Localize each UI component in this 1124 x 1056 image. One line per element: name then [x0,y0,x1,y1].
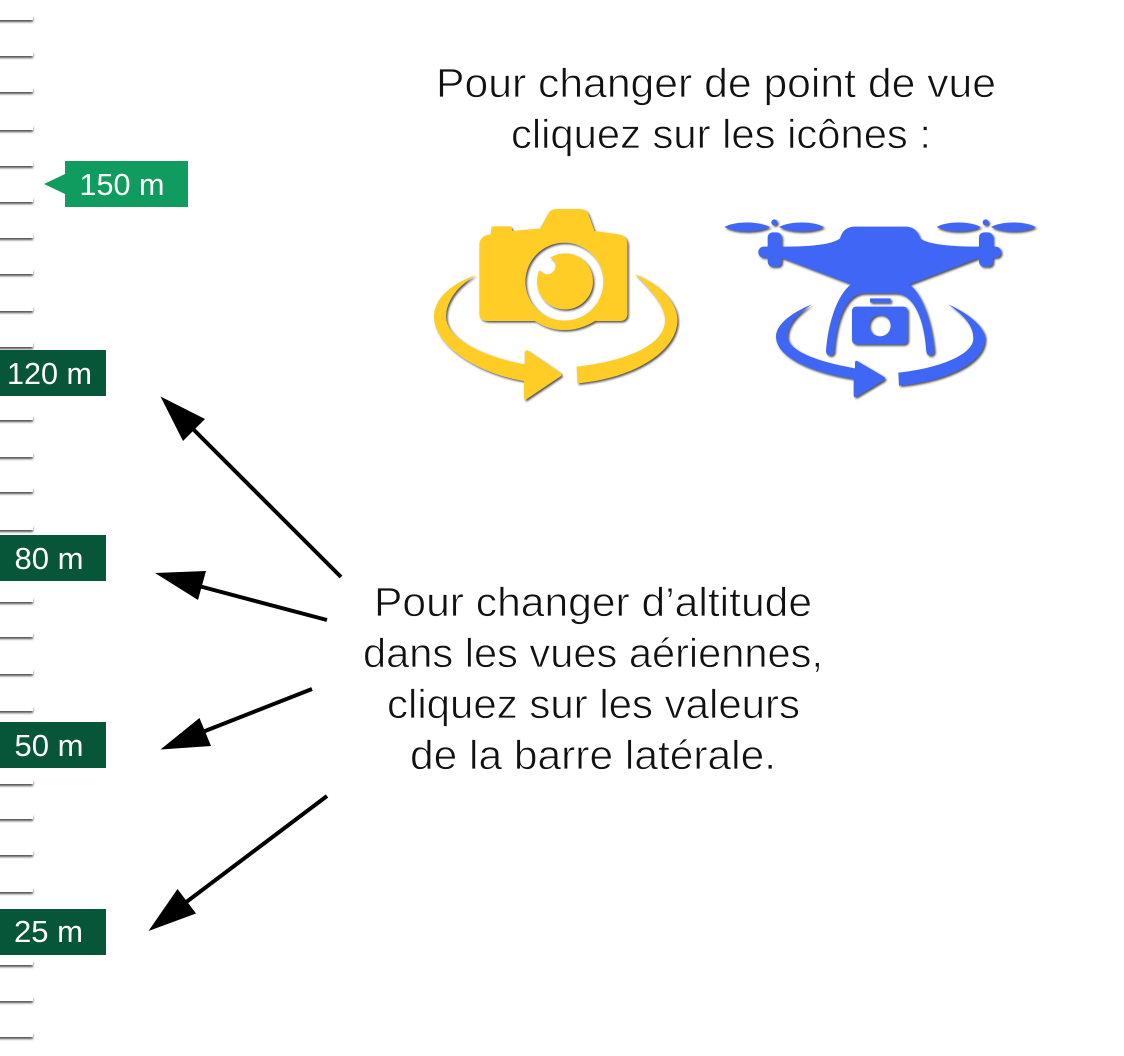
heading: point de vue instruction [436,60,996,157]
arrow: to 80 m [155,571,327,620]
arrow: to 25 m [148,796,327,931]
label: 150 m selected [44,161,188,207]
text: altitude instruction: cliquez sur les valeurs [387,681,800,727]
text: altitude instruction: dans les vues aériennes, [363,630,823,676]
label: 50 m [0,722,106,768]
icon: rotating camera [434,209,677,400]
altitude scale ticks [0,15,33,1037]
icon: rotating drone [724,219,1036,397]
arrow: to 120 m [160,396,341,577]
text: altitude instruction: Pour changer d’altitude [374,579,812,625]
text: altitude instruction [363,579,823,778]
heading: point de vue instruction: Pour changer de point de vue [436,60,996,106]
label: 25 m [0,909,106,955]
label: 50 m: 50 m [14,729,84,763]
heading: point de vue instruction: cliquez sur les icônes : [511,111,931,157]
label: 150 m selected: 150 m [80,168,164,202]
label: 25 m: 25 m [14,915,83,949]
label: 120 m [0,350,106,396]
label: 80 m [0,535,106,581]
arrow: to 50 m [160,689,312,750]
label: 120 m: 120 m [7,357,92,391]
text: altitude instruction: de la barre latérale. [410,732,776,778]
label: 80 m: 80 m [14,542,84,576]
